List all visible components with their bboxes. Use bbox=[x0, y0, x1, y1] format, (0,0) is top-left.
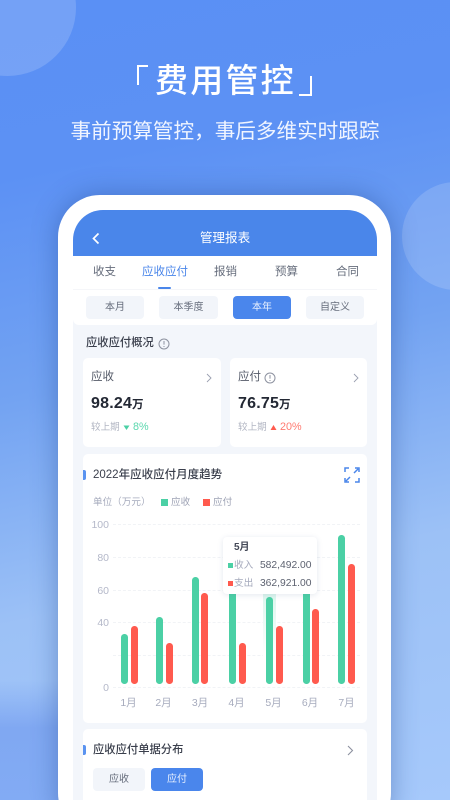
tab: 收支: 收支 bbox=[93, 266, 116, 278]
tooltip: 362,921.00 bbox=[260, 578, 312, 589]
chevron bbox=[348, 746, 354, 756]
bar chart: 1月 bbox=[120, 697, 137, 709]
bar chart: 5月 bbox=[265, 697, 282, 709]
tooltip month: 5月 bbox=[234, 542, 250, 553]
bar chart: 0 bbox=[103, 682, 109, 694]
comparison: 较上期 bbox=[238, 422, 267, 433]
decorative circle top left bbox=[0, 0, 76, 76]
legend: 应付 bbox=[213, 496, 232, 508]
comparison: 20% bbox=[280, 421, 302, 433]
button: 应收: 应收 bbox=[109, 774, 129, 785]
tab: 应收应付: 应收应付 bbox=[142, 266, 188, 278]
bar chart: 80 bbox=[97, 552, 109, 564]
legend bbox=[93, 496, 232, 508]
tooltip: 支出 bbox=[234, 578, 253, 589]
chart title: 2022年应收应付月度趋势 bbox=[93, 469, 222, 481]
button: 自定义 bbox=[306, 296, 364, 319]
comparison: 较上期 bbox=[91, 422, 120, 433]
title: 费用管控 bbox=[155, 62, 296, 99]
unit label: 单位（万元） bbox=[93, 496, 151, 508]
tab: 预算: 预算 bbox=[275, 266, 298, 278]
comparison bbox=[238, 421, 302, 433]
info icon bbox=[264, 372, 276, 384]
darker lower-left background band bbox=[0, 680, 70, 800]
tab: 合同: 合同 bbox=[336, 266, 359, 278]
divider bbox=[73, 289, 377, 290]
tooltip bbox=[223, 537, 317, 594]
card: 应收 bbox=[83, 358, 221, 447]
label: 应收 bbox=[91, 371, 114, 383]
tooltip income row bbox=[228, 563, 233, 568]
bar chart: 6月 bbox=[302, 697, 318, 709]
value: 76.75万 bbox=[238, 395, 291, 412]
button: 本年 bbox=[233, 296, 291, 319]
closing bracket bbox=[299, 76, 312, 96]
phone mockup bbox=[58, 195, 391, 800]
tooltip: 582,492.00 bbox=[260, 560, 312, 571]
section heading: 应收应付概况 bbox=[86, 337, 154, 349]
tab: 报销: 报销 bbox=[214, 266, 237, 278]
legend: 应收 bbox=[161, 499, 168, 506]
button: 应付: 应付 bbox=[167, 774, 187, 785]
app header bbox=[73, 210, 377, 256]
icon: fullscreen bbox=[344, 467, 360, 483]
tooltip: 收入 bbox=[234, 560, 253, 571]
tab underline bbox=[158, 287, 171, 289]
header title: 管理报表 bbox=[200, 231, 250, 245]
opening bracket bbox=[137, 65, 148, 85]
legend: 应付 bbox=[203, 499, 210, 506]
card: 应付 bbox=[230, 358, 367, 447]
bar chart: 4月 bbox=[228, 697, 245, 709]
value: 98.24万 bbox=[91, 395, 144, 412]
button: 应付 bbox=[151, 768, 203, 791]
comparison bbox=[91, 421, 149, 433]
bar chart: 60 bbox=[97, 585, 109, 597]
label: 应付 bbox=[238, 371, 261, 383]
bar chart: 2月 bbox=[155, 697, 172, 709]
bar chart: 40 bbox=[97, 617, 109, 629]
button: 本年: 本年 bbox=[252, 302, 272, 313]
legend: 应收 bbox=[171, 496, 190, 508]
icon: back arrow bbox=[92, 232, 99, 244]
heading marker bbox=[83, 745, 86, 755]
button: 自定义: 自定义 bbox=[320, 302, 350, 313]
bar chart: 100 bbox=[91, 519, 109, 531]
icon: info bbox=[158, 338, 170, 350]
card: chart bbox=[83, 454, 367, 723]
comparison: 8% bbox=[133, 421, 149, 433]
heading marker bbox=[83, 470, 86, 480]
button: 本月 bbox=[86, 296, 144, 319]
card: distribution bbox=[83, 729, 367, 800]
decorative circle right bbox=[402, 182, 450, 290]
tooltip expense row bbox=[228, 581, 233, 586]
button: 本季度: 本季度 bbox=[174, 302, 204, 313]
button: 本季度 bbox=[159, 296, 218, 319]
bar chart: 7月 bbox=[338, 697, 355, 709]
button: 本月: 本月 bbox=[105, 302, 125, 313]
button: 应收 bbox=[93, 768, 145, 791]
app screen bbox=[73, 210, 377, 800]
chevron bbox=[354, 374, 358, 382]
tab bar bbox=[73, 256, 377, 325]
subtitle: 事前预算管控，事后多维实时跟踪 bbox=[71, 120, 379, 143]
chevron bbox=[206, 374, 212, 382]
bar chart: 3月 bbox=[192, 697, 208, 709]
distribution title: 应收应付单据分布 bbox=[93, 744, 183, 756]
